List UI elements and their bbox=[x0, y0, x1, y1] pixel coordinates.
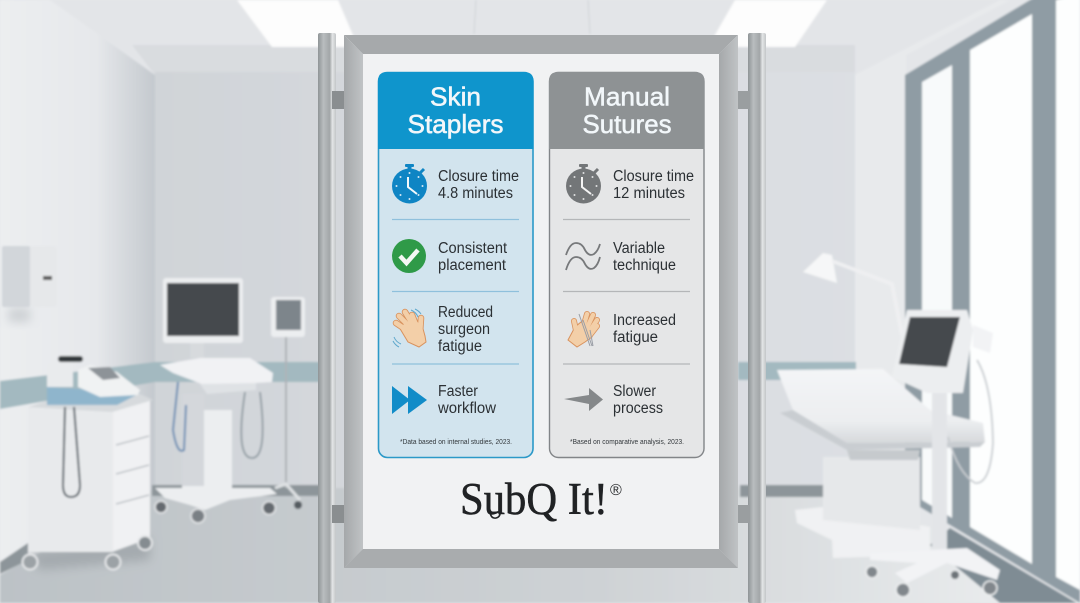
text: closure time bbox=[613, 168, 694, 202]
icon: hand with motion lines bbox=[393, 309, 426, 347]
panel header: skin staplers bbox=[378, 72, 534, 149]
text: increased fatigue bbox=[613, 312, 676, 346]
back wall bbox=[155, 72, 855, 492]
baseboards bbox=[0, 485, 825, 574]
poster stand poles bbox=[318, 33, 766, 603]
ceiling bbox=[50, 0, 1000, 75]
logo: SubQ It!: SubQ It! bbox=[460, 474, 608, 524]
text: closure time: 4.8 minutes bbox=[438, 185, 513, 202]
text: consistent placement: Consistent bbox=[438, 240, 508, 257]
text: consistent placement: placement bbox=[438, 257, 507, 274]
logo hook on the u bbox=[490, 510, 500, 518]
floor bbox=[0, 488, 1080, 603]
text: variable technique bbox=[613, 240, 676, 274]
icon: fast forward bbox=[392, 386, 427, 414]
icon: grey arrow bbox=[564, 388, 603, 411]
text: increased fatigue: Increased bbox=[613, 312, 676, 329]
IV stand monitor bbox=[271, 297, 305, 509]
heading: Manual Sutures bbox=[582, 82, 672, 139]
text: faster workflow bbox=[437, 383, 497, 417]
ultrasound cart bbox=[155, 278, 277, 523]
icon: fatigued hand bbox=[568, 314, 597, 347]
text: faster workflow: workflow bbox=[437, 400, 497, 417]
dispenser bbox=[2, 246, 57, 322]
text: increased fatigue: fatigue bbox=[613, 329, 658, 346]
icon: green check bbox=[392, 239, 426, 273]
text: closure time: 12 minutes bbox=[613, 185, 685, 202]
registered mark: ® bbox=[610, 482, 622, 499]
footnote: internal studies: *Data based on internal studies, 2023. bbox=[400, 437, 512, 446]
wall stripe bbox=[0, 362, 856, 409]
exam bed bbox=[777, 369, 985, 558]
heading: Manual Sutures: Manual bbox=[584, 82, 670, 112]
cabinet with device bbox=[22, 356, 153, 570]
monitor on rolling stand bbox=[866, 310, 1000, 597]
panel: skin staplers bbox=[378, 72, 534, 458]
poster frame bbox=[344, 35, 738, 568]
text: closure time bbox=[438, 168, 519, 202]
text: reduced surgeon fatigue bbox=[438, 304, 493, 355]
text: closure time: Closure time bbox=[613, 168, 694, 185]
text: variable technique: Variable bbox=[613, 240, 665, 257]
text: reduced surgeon fatigue: fatigue bbox=[438, 338, 482, 355]
panel: manual sutures bbox=[549, 72, 704, 458]
icon: wavy lines bbox=[566, 243, 600, 270]
footnote: comparative analysis: *Based on comparative analysis, 2023. bbox=[570, 437, 684, 446]
right wall bbox=[855, 0, 1010, 530]
heading: Skin Staplers: Staplers bbox=[408, 109, 504, 139]
icon: blue stopwatch bbox=[392, 164, 427, 204]
panel header: manual sutures bbox=[549, 72, 704, 149]
text: closure time: Closure time bbox=[438, 168, 519, 185]
heading: Skin Staplers bbox=[408, 82, 504, 139]
text: slower process: Slower bbox=[613, 383, 656, 400]
exam lamp bbox=[803, 253, 902, 335]
text: slower process: process bbox=[613, 400, 663, 417]
left wall bbox=[0, 0, 155, 575]
text: reduced surgeon fatigue: surgeon bbox=[438, 321, 490, 338]
text: reduced surgeon fatigue: Reduced bbox=[438, 304, 493, 321]
text: consistent placement bbox=[438, 240, 508, 274]
poster sheet bbox=[363, 54, 719, 549]
text: slower process bbox=[613, 383, 663, 417]
text: faster workflow: Faster bbox=[438, 383, 478, 400]
heading: Skin Staplers: Skin bbox=[430, 82, 481, 112]
text: variable technique: technique bbox=[613, 257, 676, 274]
windows bbox=[905, 0, 1080, 603]
heading: Manual Sutures: Sutures bbox=[582, 109, 672, 139]
icon: grey stopwatch bbox=[566, 164, 601, 204]
